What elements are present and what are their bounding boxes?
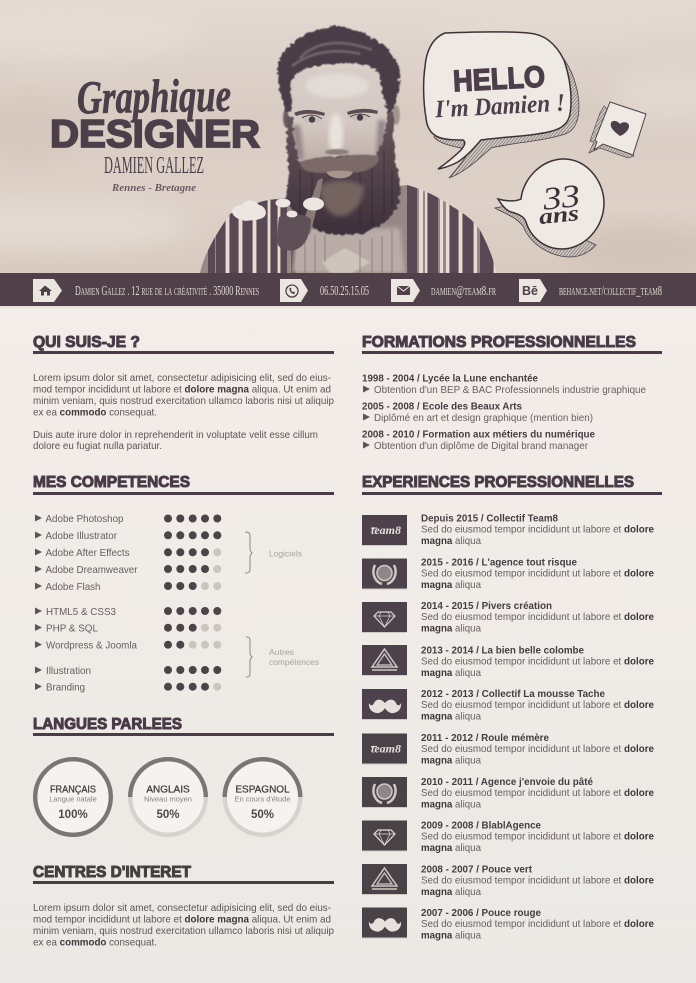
panel: mes competences (33, 474, 334, 694)
text block: dolore eu fugiat nulla pariatur. (33, 441, 162, 452)
experience 6: team8 (371, 742, 401, 756)
experience 10: magna aliqua (421, 930, 481, 942)
heading: CENTRES D'INTERET (33, 864, 191, 881)
face (287, 111, 378, 162)
experience 9: magna aliqua (421, 887, 481, 898)
experience 9: Sed do eiusmod tempor incididunt ut labore et dolore (421, 876, 654, 886)
panel: langues parlees (33, 716, 334, 835)
heading: EXPERIENCES PROFESSIONNELLES (362, 474, 634, 491)
ears (283, 105, 400, 128)
experience 7 (362, 777, 654, 810)
text block: Lorem ipsum dolor sit amet, consectetur adipisicing elit, sed do eius- (33, 373, 331, 384)
experience 4: Sed do eiusmod tempor incididunt ut labore et dolore (421, 656, 654, 668)
language: anglais: Niveau moyen (144, 794, 192, 804)
experience 4: 2013 - 2014 / La bien belle colombe (421, 646, 584, 656)
hair (277, 26, 400, 114)
experience 5: 2012 - 2013 / Collectif La mousse Tache (421, 689, 605, 700)
bubble body (424, 32, 571, 169)
formation 1: Obtention d'un BEP & BAC Professionnels industrie graphique (374, 385, 646, 396)
speech bubble: 33 ans (495, 159, 604, 257)
language: francais (35, 759, 111, 835)
text block: mod tempor incididunt ut labore et dolore magna aliqua. Ut enim ad (33, 384, 331, 396)
language: anglais: ANGLAIS (146, 784, 190, 796)
speech bubble: Hello (424, 32, 579, 178)
beard strands (300, 150, 392, 230)
panel: centres d'interet (33, 864, 334, 948)
skill labels: PHP & SQL (46, 624, 98, 634)
portrait of bearded man with pipe (195, 26, 505, 275)
language: francais: 100% (58, 809, 88, 821)
panel: formations professionnelles (362, 334, 662, 452)
text block: ex ea commodo consequat. (33, 938, 157, 948)
text block (33, 373, 334, 452)
experience 8: Sed do eiusmod tempor incididunt ut labore et dolore (421, 832, 654, 842)
experience 9: 2008 - 2007 / Pouce vert (421, 864, 533, 876)
location: Rennes - Bretagne: Rennes - Bretagne (111, 183, 197, 194)
experience 6: 2011 - 2012 / Roule mémère (421, 733, 549, 744)
heading: FORMATIONS PROFESSIONNELLES (362, 334, 636, 351)
experience 1: Depuis 2015 / Collectif Team8 (421, 514, 558, 524)
sky background (0, 0, 696, 274)
email: damien@team8.fr (431, 284, 496, 299)
skill labels: Adobe After Effects (46, 548, 130, 559)
formation 1 (362, 374, 646, 396)
experience 2: 2015 - 2016 / L'agence tout risque (421, 558, 577, 568)
text block (33, 903, 334, 948)
experience 10: 2007 - 2006 / Pouce rouge (421, 908, 541, 919)
experience 6: magna aliqua (421, 756, 481, 766)
smoke clouds (232, 198, 324, 221)
text block: minim veniam, quis nostrud exercitation ullamco laboris nisi ut aliquip (33, 926, 334, 937)
experience 1 (362, 514, 654, 547)
experience 3: Sed do eiusmod tempor incididunt ut labore et dolore (421, 612, 654, 623)
experience 3: magna aliqua (421, 624, 481, 634)
experience 5: Sed do eiusmod tempor incididunt ut labore et dolore (421, 700, 654, 711)
text block: Lorem ipsum dolor sit amet, consectetur adipisicing elit, sed do eius- (33, 903, 331, 914)
icon: behance (519, 279, 547, 302)
experience 4: magna aliqua (421, 668, 481, 679)
icon: mail (391, 279, 420, 302)
speech bubble: heart (589, 102, 646, 158)
heading: MES COMPETENCES (33, 474, 190, 491)
formation 1: 1998 - 2004 / Lycée la Lune enchantée (362, 374, 538, 384)
label: autres competences (269, 647, 319, 667)
address: Damien Gallez . 12 rue de la créativité . 35000 Rennes (75, 284, 259, 299)
skill labels: Adobe Flash (46, 582, 101, 593)
skill labels: Adobe Illustrator (46, 531, 118, 542)
experience 3 (362, 601, 654, 634)
bracket: autres competences (246, 637, 252, 677)
experience 6: Sed do eiusmod tempor incididunt ut labore et dolore (421, 744, 654, 755)
text block: ex ea commodo consequat. (33, 408, 157, 418)
formation 2: 2005 - 2008 / Ecole des Beaux Arts (362, 402, 522, 412)
phone number: 06.50.25.15.05 (320, 284, 369, 299)
text block: mod tempor incididunt ut labore et dolore magna aliqua. Ut enim ad (33, 914, 331, 926)
bubble body (498, 159, 604, 249)
experience 6 (362, 733, 654, 766)
formation 3: 2008 - 2010 / Formation aux métiers du numérique (362, 430, 595, 440)
label: autres competences: Autres (269, 647, 294, 657)
language: francais: FRANÇAIS (50, 784, 96, 796)
experience 8: magna aliqua (421, 843, 481, 854)
heading: LANGUES PARLEES (33, 716, 182, 733)
skill labels: HTML5 & CSS3 (46, 607, 116, 618)
contact band (0, 273, 696, 308)
language: espagnol: 50% (251, 809, 274, 821)
panel: qui suis-je (33, 334, 334, 452)
name: Damien Gallez: DAMIEN GALLEZ (104, 153, 204, 179)
experience 1: Sed do eiusmod tempor incididunt ut labore et dolore (421, 524, 654, 536)
experience 5 (362, 689, 654, 722)
hello text: HELLO (452, 61, 546, 98)
experience 10 (362, 908, 654, 942)
experience 9 (362, 864, 654, 898)
eyes and brows (294, 109, 378, 155)
bubble shadow (434, 58, 580, 178)
title: DESIGNER: DESIGNER (50, 113, 260, 156)
formation 2 (362, 402, 593, 424)
experience 8: 2009 - 2008 / BlablAgence (421, 820, 541, 832)
experience 1: team8 (371, 523, 401, 537)
I'm Damien text: I'm Damien ! (433, 90, 566, 123)
label: logiciels: Logiciels (269, 548, 302, 558)
header photo panel (0, 0, 696, 275)
title: Graphique: Graphique (77, 70, 231, 124)
language: espagnol (225, 759, 300, 835)
bubble shadow (495, 205, 596, 257)
pipe (277, 178, 323, 251)
experience 3: 2014 - 2015 / Pivers création (421, 601, 552, 612)
language: anglais: 50% (156, 809, 180, 821)
experience 2 (362, 558, 654, 591)
bracket: logiciels (245, 532, 252, 573)
experience 10: Sed do eiusmod tempor incididunt ut labore et dolore (421, 919, 654, 930)
age unit: ans (538, 200, 580, 229)
formation 2: Diplômé en art et design graphique (mention bien) (374, 413, 593, 424)
experience 4 (362, 645, 654, 679)
skill labels: Wordpress & Joomla (46, 640, 137, 652)
experience 7: 2010 - 2011 / Agence j'envoie du pâté (421, 777, 593, 788)
chest collar area (292, 228, 405, 273)
skill rating dots (164, 514, 221, 691)
experience 1: magna aliqua (421, 536, 481, 547)
experience 8 (362, 820, 654, 854)
language: espagnol: En cours d'étude (234, 794, 291, 804)
icon: home (33, 279, 62, 302)
experience 2: Sed do eiusmod tempor incididunt ut labore et dolore (421, 568, 654, 580)
skill labels: Adobe Photoshop (46, 514, 124, 525)
text block: Duis aute irure dolor in reprehenderit in voluptate velit esse cillum (33, 430, 318, 441)
formation 3: Obtention d'un diplôme de Digital brand manager (374, 441, 589, 452)
skill labels: Adobe Dreamweaver (46, 565, 138, 576)
experience 7: Sed do eiusmod tempor incididunt ut labore et dolore (421, 788, 654, 799)
skill labels: Branding (46, 682, 85, 694)
skill labels (35, 514, 138, 694)
lips and chin (326, 170, 353, 178)
icon: behance: Bē (522, 284, 538, 298)
experience 2: magna aliqua (421, 580, 481, 591)
label: autres competences: compétences (269, 657, 319, 667)
icon: phone (280, 279, 308, 302)
striped shirt (200, 185, 497, 273)
skill labels: Illustration (46, 666, 91, 677)
icon: heart (611, 121, 629, 136)
language: anglais (130, 759, 206, 835)
experience 7: magna aliqua (421, 800, 481, 810)
beard (286, 112, 400, 235)
language: francais: Langue natale (49, 794, 97, 804)
text block: minim veniam, quis nostrud exercitation ullamco laboris nisi ut aliquip (33, 396, 334, 407)
formation 3 (362, 430, 595, 452)
panel: experiences professionnelles (362, 474, 662, 942)
moustache (300, 155, 379, 173)
language: espagnol: ESPAGNOL (235, 784, 290, 796)
age number: 33 (540, 177, 582, 217)
heading: QUI SUIS-JE ? (33, 334, 140, 351)
experience 5: magna aliqua (421, 712, 481, 722)
